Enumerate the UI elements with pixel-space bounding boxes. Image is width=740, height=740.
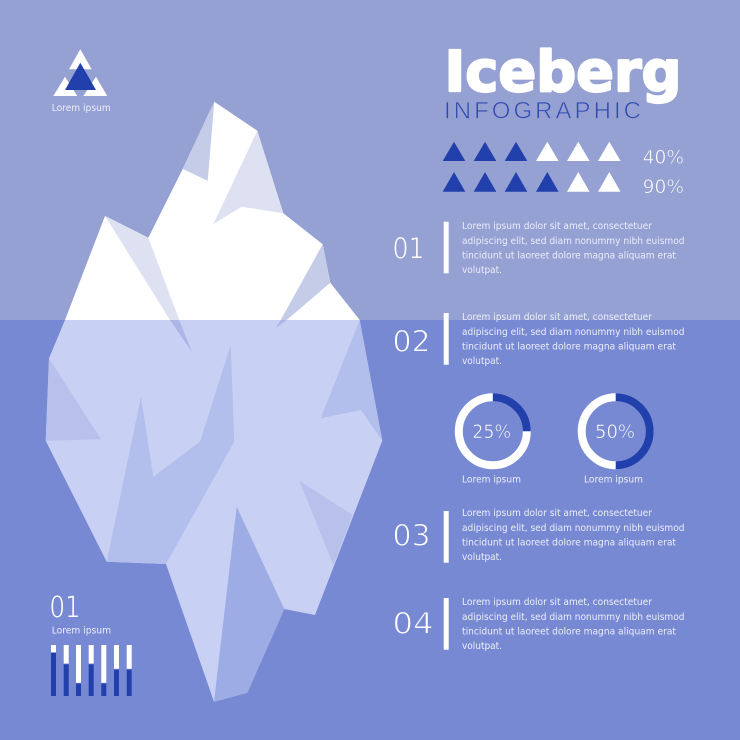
- paragraph 04: Lorem ipsum dolor sit amet, consectetuer: [462, 597, 652, 608]
- paragraph 02: [462, 312, 685, 367]
- number 03: 03: [392, 518, 430, 552]
- text block 03: [392, 508, 685, 563]
- paragraph 03: volutpat.: [462, 552, 502, 563]
- rating row 90%: [443, 172, 684, 198]
- paragraph 02: adipiscing elit, sed diam nonummy nibh euismod: [462, 327, 685, 338]
- paragraph 04: tincidunt ut laoreet dolore magna aliquam erat: [462, 626, 676, 638]
- number 04: 04: [392, 606, 434, 640]
- text block 04: [392, 597, 685, 652]
- paragraph 02: tincidunt ut laoreet dolore magna aliquam erat: [462, 342, 676, 352]
- stat caption: Lorem ipsum: [52, 625, 111, 636]
- logo caption: Lorem ipsum: [52, 103, 111, 114]
- paragraph 03: tincidunt ut laoreet dolore magna aliquam erat: [462, 538, 676, 548]
- rating row 90%: 90%: [643, 177, 684, 198]
- donut chart 25%: 25%: [472, 422, 511, 443]
- paragraph 01: [462, 221, 685, 276]
- stat number 01: 01: [50, 590, 80, 626]
- paragraph 01: Lorem ipsum dolor sit amet, consectetuer: [462, 221, 652, 232]
- paragraph 03: [462, 508, 685, 563]
- paragraph 01: adipiscing elit, sed diam nonummy nibh euismod: [462, 236, 685, 247]
- donut chart 50%: 50%: [595, 422, 635, 443]
- divider bar 01: [444, 222, 449, 273]
- text block 01: [392, 221, 685, 276]
- paragraph 03: adipiscing elit, sed diam nonummy nibh euismod: [462, 523, 685, 534]
- paragraph 04: volutpat.: [462, 641, 502, 652]
- subheading: INFOGRAPHIC: INFOGRAPHIC: [444, 98, 641, 125]
- donut chart 25%: [459, 397, 527, 485]
- paragraph 04: [462, 597, 685, 652]
- heading: Iceberg: Iceberg: [444, 40, 682, 105]
- logo block: [52, 49, 111, 114]
- bottom-left stat block: [50, 590, 132, 696]
- number 01: 01: [392, 231, 424, 265]
- triangle rating rows: [443, 142, 684, 198]
- rating row 40%: [443, 142, 684, 168]
- iceberg below water: [46, 320, 382, 702]
- donut chart 50%: [582, 397, 650, 485]
- paragraph 01: volutpat.: [462, 265, 502, 276]
- paragraph 02: Lorem ipsum dolor sit amet, consectetuer: [462, 312, 652, 323]
- divider bar 02: [444, 313, 449, 365]
- paragraph 02: volutpat.: [462, 356, 502, 367]
- icon: triangles logo: [53, 49, 107, 96]
- paragraph 04: adipiscing elit, sed diam nonummy nibh euismod: [462, 612, 685, 623]
- paragraph 01: tincidunt ut laoreet dolore magna aliquam erat: [462, 250, 676, 262]
- number 02: 02: [392, 324, 430, 358]
- iceberg illustration: [46, 102, 382, 702]
- bar chart: [51, 645, 132, 696]
- donut chart 50%: Lorem ipsum: [584, 474, 643, 485]
- divider bar 04: [444, 598, 449, 650]
- divider bar 03: [444, 511, 449, 563]
- text block 02: [392, 312, 685, 367]
- rating row 40%: 40%: [643, 148, 684, 168]
- donut chart 25%: Lorem ipsum: [462, 474, 521, 485]
- water background: [0, 320, 740, 740]
- sky background: [0, 0, 740, 320]
- iceberg above water: [65, 102, 360, 320]
- title: [444, 40, 682, 125]
- paragraph 03: Lorem ipsum dolor sit amet, consectetuer: [462, 508, 652, 519]
